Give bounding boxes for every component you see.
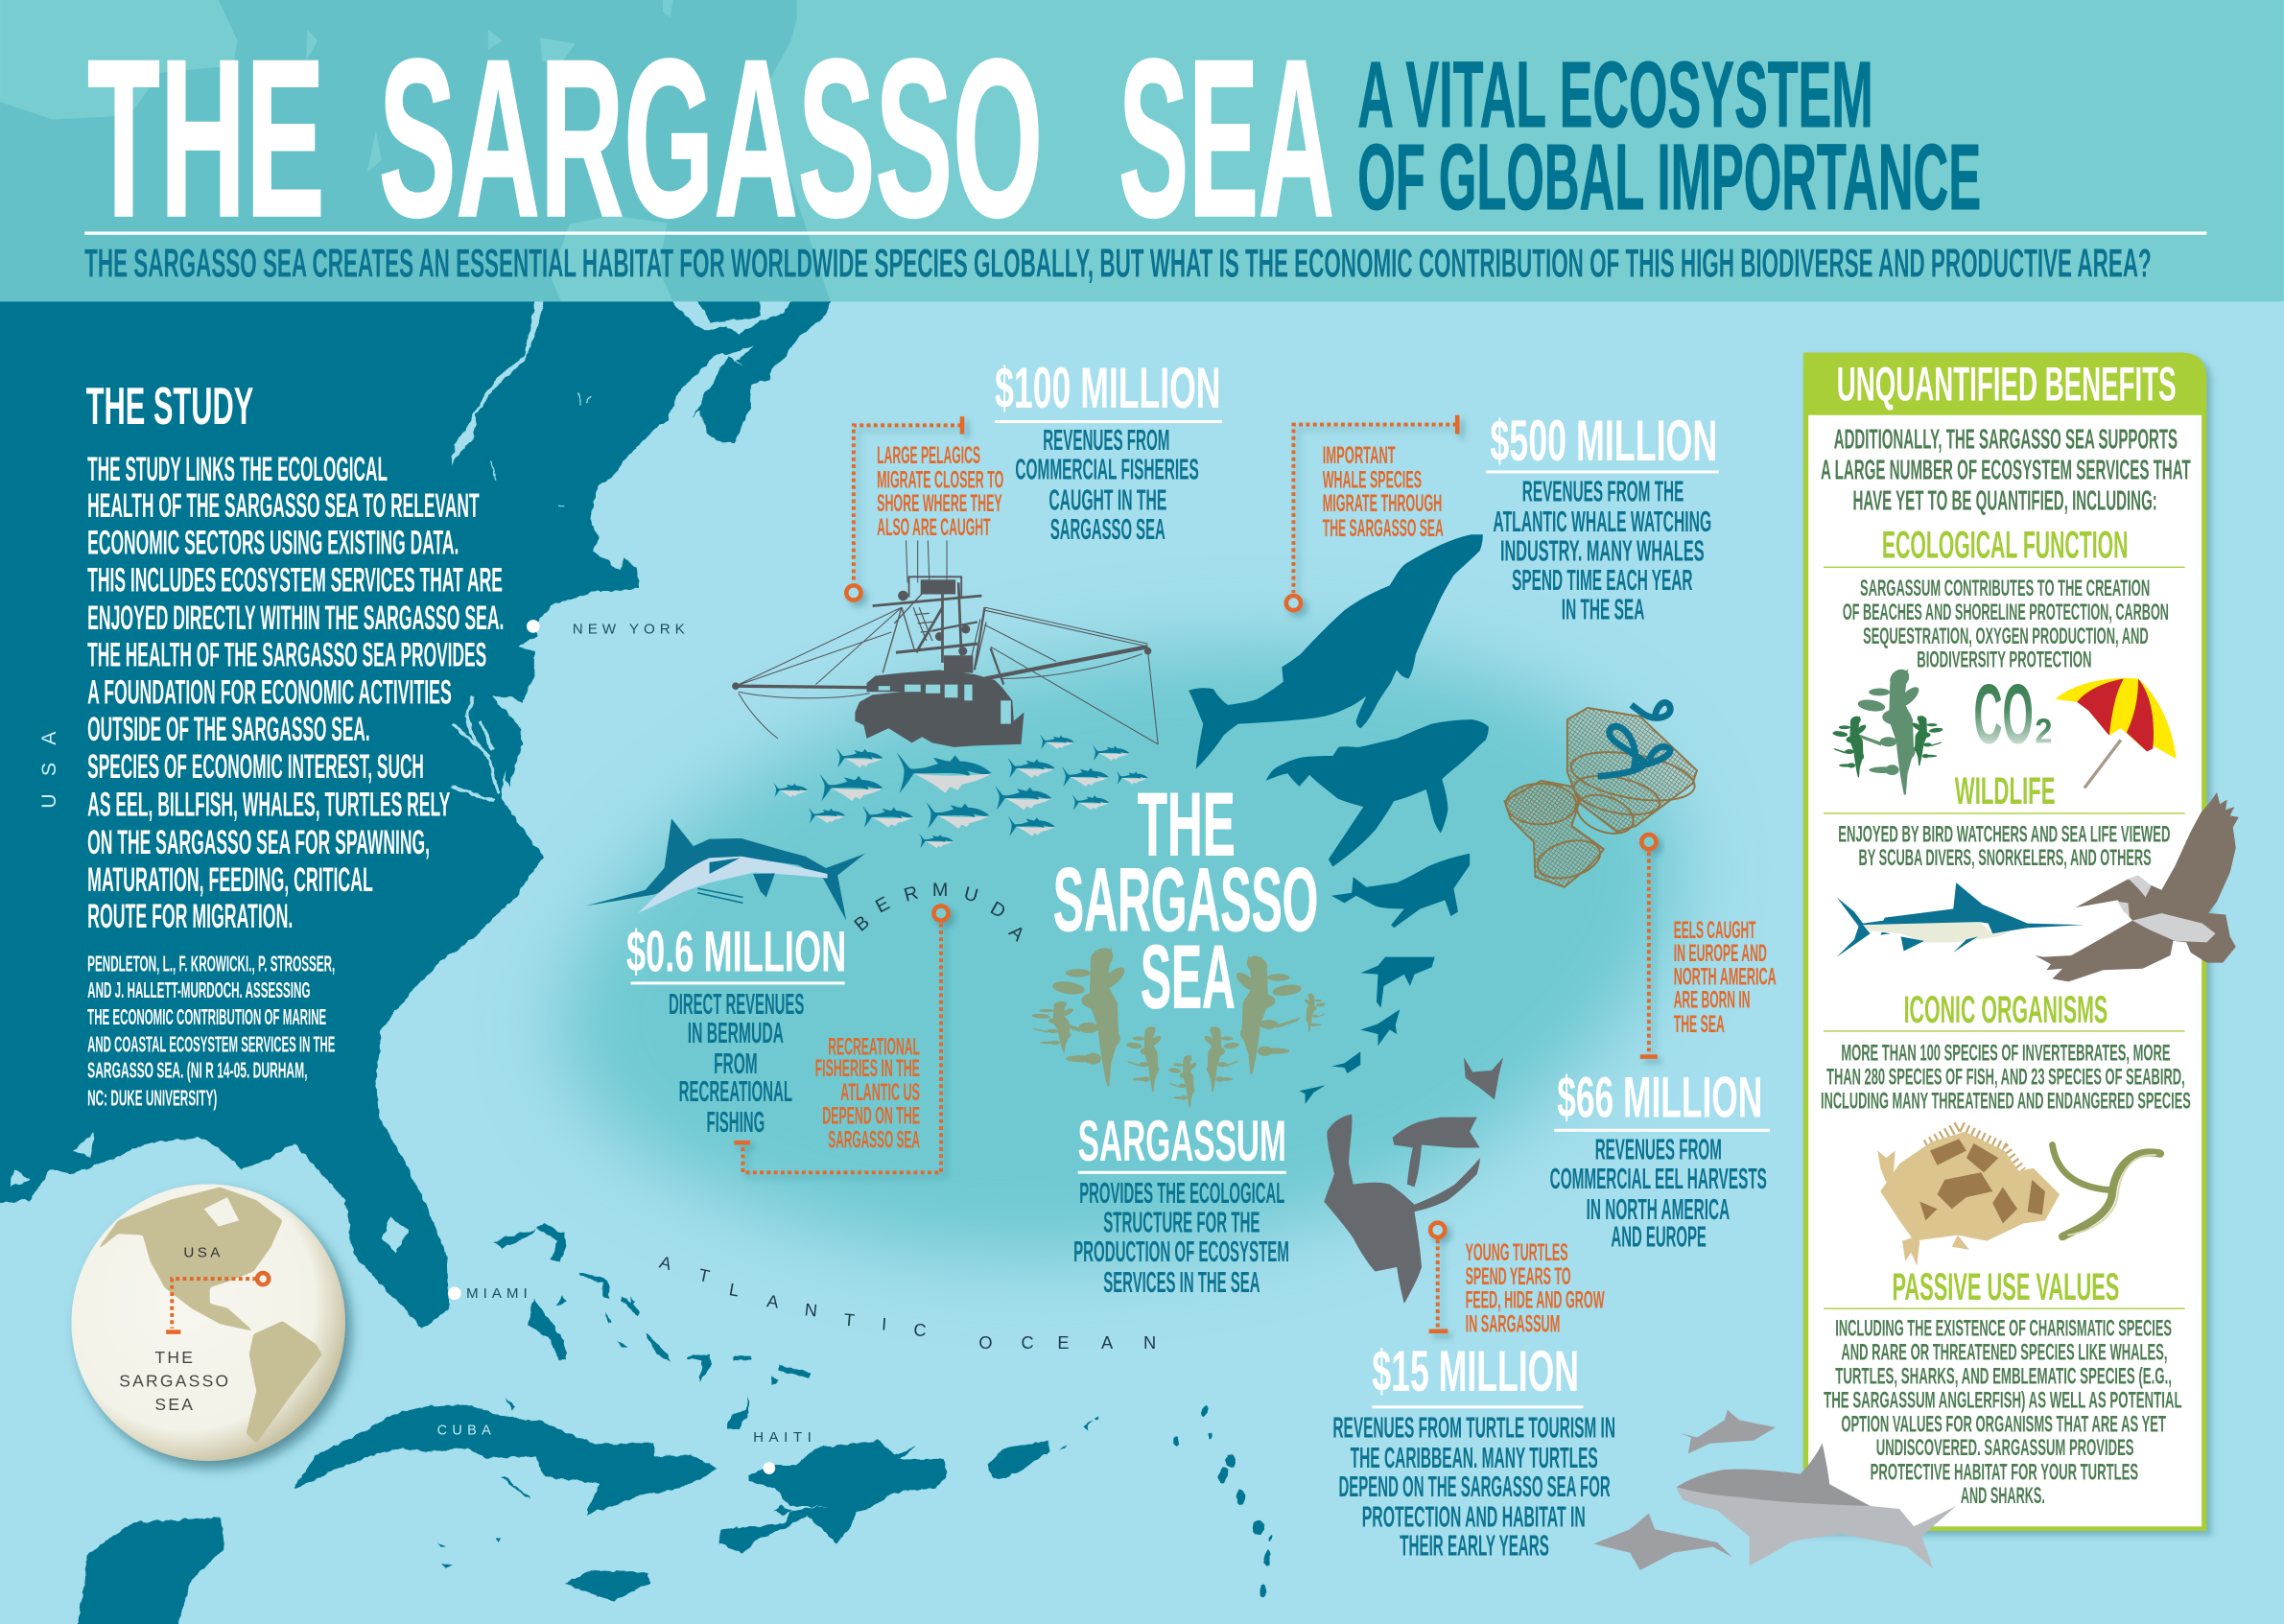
callout: $15 million: REVENUES FROM TURTLE TOURISM IN [1332, 1413, 1615, 1445]
text block: study description: A FOUNDATION FOR ECONOMIC ACTIVITIES [87, 673, 452, 711]
boat windows [879, 685, 1011, 724]
icon: pelican [2035, 792, 2239, 981]
land: Jamaica [565, 1570, 651, 1601]
gulf of saint lawrence [671, 298, 794, 334]
globe connector [172, 1279, 256, 1329]
callout note: eels: NORTH AMERICA [1674, 963, 1777, 990]
callout: $0.6 million: IN BERMUDA [688, 1018, 784, 1049]
callout note: large pelagics: LARGE PELAGICS [877, 442, 980, 469]
callout: $0.6 million: RECREATIONAL [679, 1076, 792, 1108]
marlin [585, 818, 865, 921]
icon: CO2 [1973, 666, 2052, 761]
boat hull [855, 670, 1024, 747]
text block: study description: ENJOYED DIRECTLY WITHIN THE SARGASSO SEA. [87, 600, 504, 637]
text block: citation: AND J. HALLETT-MURDOCH. ASSESSING [87, 977, 311, 1002]
callout: $66 million: IN NORTH AMERICA [1587, 1194, 1730, 1226]
chesapeake bay [452, 696, 498, 801]
title: The Sargasso Sea [87, 12, 1334, 264]
callout note: young turtles: SPEND YEARS TO [1466, 1263, 1571, 1290]
callout note: whale species: MIGRATE THROUGH [1323, 490, 1442, 517]
icon: eels [2052, 1144, 2160, 1236]
callout note: recreational fisheries [734, 906, 949, 1172]
globe inset [71, 1184, 345, 1461]
text block: citation: NC: DUKE UNIVERSITY) [87, 1085, 217, 1110]
sargasso sea glow [560, 645, 1681, 1258]
callout note: large pelagics [846, 416, 1003, 600]
map label: Bermuda: BERMUDA [851, 880, 1029, 946]
whale 6 [1331, 1051, 1360, 1073]
callout: $0.6 million: DIRECT REVENUES [669, 989, 804, 1021]
heading: the study: THE STUDY [86, 377, 253, 435]
panel intro [1821, 425, 2191, 516]
header band [0, 0, 2284, 301]
callout: $0.6 million: $0.6 MILLION [626, 919, 846, 984]
callout: $66 million: COMMERCIAL EEL HARVESTS [1550, 1164, 1767, 1195]
center heading: the sargasso sea [1053, 773, 1318, 1027]
callout note: whale species: THE SARGASSO SEA [1323, 515, 1444, 542]
callout: sargassum: SERVICES IN THE SEA [1103, 1267, 1260, 1299]
callout: $66 million: AND EUROPE [1611, 1222, 1707, 1254]
callout note: recreational fisheries: RECREATIONAL [828, 1033, 920, 1060]
globe: ice cap [204, 1197, 239, 1226]
text block: study description: THIS INCLUDES ECOSYSTEM SERVICES THAT ARE [87, 561, 503, 599]
text block: study description: ROUTE FOR MIGRATION. [87, 898, 293, 935]
callout note: eels: ARE BORN IN [1674, 987, 1750, 1014]
callout: $0.6 million: FISHING [707, 1107, 765, 1139]
icon: sargassum [1832, 666, 1943, 794]
callout note: eels: EELS CAUGHT [1674, 917, 1756, 944]
text: AND COASTAL ECOSYSTEM SERVICES IN THE [87, 1031, 335, 1056]
map label: Miami: MIAMI [466, 1285, 528, 1302]
text block: study description: THE STUDY LINKS THE ECOLOGICAL [87, 451, 388, 488]
map label: Haiti [753, 1429, 812, 1474]
lakes [491, 393, 590, 506]
turtle: large [1324, 1115, 1480, 1304]
text block: study description: AS EEL, BILLFISH, WHALES, TURTLES RELY [87, 786, 450, 823]
callout note: eels: IN EUROPE AND [1674, 940, 1767, 967]
turtle: small [1464, 1057, 1503, 1099]
text block: study description: HEALTH OF THE SARGASSO SEA TO RELEVANT [87, 487, 480, 525]
section: wildlife [1824, 770, 2185, 871]
section: passive use values: AND SHARKS. [1961, 1483, 2045, 1509]
text block: study description: ON THE SARGASSO SEA FOR SPAWNING, [87, 824, 430, 861]
land: keys and lesser antilles [437, 1399, 1099, 1568]
subtitle: a vital ecosystem of global importance [1357, 42, 1981, 229]
callout: sargassum: PROVIDES THE ECOLOGICAL [1079, 1178, 1284, 1210]
map label: Atlantic Ocean: ATLANTIC OCEAN [657, 1253, 1156, 1353]
callout: $500 million [1486, 408, 1719, 625]
callout note: eels [1640, 835, 1777, 1059]
globe: south america [247, 1321, 322, 1444]
header rule [84, 231, 2206, 235]
callout note: recreational fisheries: SARGASSO SEA [828, 1126, 920, 1153]
callout: $15 million: THEIR EARLY YEARS [1400, 1531, 1549, 1563]
text block: study description: ECONOMIC SECTORS USING EXISTING DATA. [87, 525, 459, 562]
text: PRODUCTION OF ECOSYSTEM [1073, 1236, 1289, 1268]
school of tuna [773, 735, 1148, 848]
globe: north america [96, 1187, 283, 1331]
callout: $100 million: $100 MILLION [995, 355, 1220, 420]
callout note: recreational fisheries: FISHERIES IN THE [815, 1055, 920, 1082]
land: Hispaniola [718, 1441, 947, 1553]
callout: $500 million: INDUSTRY. MANY WHALES [1500, 536, 1705, 568]
callout note: young turtles: FEED, HIDE AND GROW [1466, 1287, 1605, 1314]
callout: $500 million: IN THE SEA [1562, 594, 1644, 625]
land: Bahamas [494, 1223, 812, 1429]
whale 3 [1331, 854, 1470, 928]
callout note: young turtles [1429, 1223, 1605, 1338]
text block: study description: OUTSIDE OF THE SARGASSO SEA. [87, 711, 370, 748]
large shark [1677, 1444, 1956, 1568]
whale 1 [1189, 534, 1483, 769]
icon: anglerfish [1877, 1126, 2060, 1265]
whales [1189, 534, 1489, 1104]
text: MIGRATE CLOSER TO [877, 467, 1003, 494]
eel nets [1505, 708, 1698, 887]
text block: citation: THE ECONOMIC CONTRIBUTION OF MARINE [87, 1004, 326, 1029]
sargassum plants [1031, 944, 1326, 1108]
turtle: medium [1393, 1118, 1480, 1187]
callout: $100 million: REVENUES FROM [1043, 425, 1169, 457]
turtles [1324, 1057, 1503, 1304]
callout note: eels: THE SEA [1674, 1011, 1725, 1038]
saint lawrence river [452, 292, 546, 466]
text block: study description: SPECIES OF ECONOMIC INTEREST, SUCH [87, 748, 424, 786]
callout: $15 million: PROTECTION AND HABITAT IN [1362, 1501, 1586, 1533]
callout: $15 million [1332, 1338, 1615, 1563]
title: The Sargasso Sea: SARGASSO [379, 12, 1043, 264]
callout: $100 million: CAUGHT IN THE [1048, 484, 1166, 516]
callout note: large pelagics: ALSO ARE CAUGHT [877, 514, 991, 541]
icon: beach umbrella [2056, 678, 2177, 788]
callout: $500 million: ATLANTIC WHALE WATCHING [1493, 506, 1711, 538]
text block: study description: MATURATION, FEEDING, CRITICAL [87, 861, 373, 899]
callout: $100 million: SARGASSO SEA [1050, 514, 1166, 546]
text block: citation [87, 952, 335, 1110]
land: Yucatan [78, 1518, 224, 1624]
center heading: the sargasso sea: SARGASSO [1053, 849, 1318, 950]
section: ecological function: BIODIVERSITY PROTECTION [1917, 647, 2091, 672]
map label: Haiti: HAITI [753, 1429, 812, 1446]
map label: New York [527, 620, 685, 637]
callout note: whale species: IMPORTANT [1323, 442, 1396, 469]
callout: sargassum: STRUCTURE FOR THE [1103, 1208, 1260, 1239]
callout: $66 million: $66 MILLION [1557, 1065, 1762, 1130]
callout: sargassum [1073, 1108, 1289, 1299]
boat rigging [736, 540, 1158, 744]
land: Cuba [294, 1405, 718, 1515]
callout note: young turtles: YOUNG TURTLES [1466, 1239, 1568, 1266]
whale 5 [1360, 1009, 1400, 1046]
callout note: large pelagics: SHORE WHERE THEY [877, 490, 1002, 517]
section: iconic organisms: ICONIC ORGANISMS [1904, 989, 2107, 1031]
shark: lower left [1593, 1514, 1731, 1570]
land: Puerto Rico [988, 1441, 1048, 1480]
callout: $15 million: $15 MILLION [1372, 1338, 1579, 1403]
icon: CO2: CO [1973, 666, 2034, 761]
globe label: the sargasso sea [119, 1348, 230, 1414]
section: ecological function [1824, 525, 2185, 672]
map label: Cuba: CUBA [437, 1424, 491, 1439]
boat booms and masts [736, 577, 1148, 688]
fishing boat [732, 540, 1158, 747]
text block: study description [87, 451, 504, 935]
callout: $0.6 million [626, 919, 846, 1139]
callout: $500 million: $500 MILLION [1490, 408, 1717, 473]
inlet [725, 345, 755, 367]
text block: citation: SARGASSO SEA. (NI R 14-05. DURHAM, [87, 1058, 307, 1083]
whale 2 [1266, 719, 1489, 866]
whale 4 [1360, 957, 1435, 1008]
icon: CO2: 2 [2035, 711, 2052, 750]
callout note: young turtles: IN SARGASSUM [1466, 1311, 1560, 1338]
land: eastern North America [0, 284, 837, 1329]
icon: swordfish [1837, 883, 2084, 957]
center heading: the sargasso sea: THE [1138, 773, 1236, 874]
callout: $15 million: DEPEND ON THE SARGASSO SEA FOR [1338, 1471, 1611, 1503]
panel: unquantified benefits [1803, 352, 2239, 1531]
eel in the net [1598, 702, 1670, 776]
center heading: the sargasso sea: SEA [1141, 927, 1236, 1027]
callout: $100 million: COMMERCIAL FISHERIES [1015, 455, 1199, 486]
map label: New York: NEW YORK [573, 621, 685, 637]
callout: $66 million [1550, 1065, 1770, 1254]
whale 7 [1299, 1085, 1326, 1104]
section: passive use values [1824, 1266, 2185, 1509]
callout: $500 million: REVENUES FROM THE [1522, 476, 1684, 507]
callout: $15 million: THE CARIBBEAN. MANY TURTLES [1351, 1443, 1598, 1474]
globe label: the sargasso sea: SEA [154, 1395, 195, 1414]
title: The Sargasso Sea: THE [87, 12, 325, 264]
map: land masses [0, 284, 1272, 1624]
section: wildlife: WILDLIFE [1955, 770, 2056, 812]
text block: study description: THE HEALTH OF THE SARGASSO SEA PROVIDES [87, 637, 486, 674]
globe label: USA: USA [183, 1244, 221, 1260]
island [696, 298, 761, 322]
globe label: the sargasso sea: THE [154, 1348, 195, 1367]
text: SEA [1118, 12, 1334, 264]
callout note: whale species: WHALE SPECIES [1323, 467, 1422, 494]
shark: top [1681, 1410, 1776, 1453]
globe label: the sargasso sea: SARGASSO [119, 1372, 230, 1391]
text: PENDLETON, L., F. KROWICKI., P. STROSSER, [87, 952, 335, 977]
callout: $500 million: SPEND TIME EACH YEAR [1512, 565, 1692, 597]
callout: $66 million: REVENUES FROM [1595, 1135, 1722, 1166]
sharks: background [1593, 1410, 1776, 1570]
callout note: recreational fisheries: ATLANTIC US [840, 1079, 920, 1106]
long island sound [540, 598, 582, 619]
callout: $0.6 million: FROM [714, 1048, 758, 1080]
section: iconic organisms [1821, 989, 2191, 1114]
callout note: whale species [1286, 415, 1460, 610]
callout: $100 million [995, 355, 1222, 546]
map label: USA: USA [37, 714, 60, 809]
callout: sargassum: SARGASSUM [1078, 1108, 1286, 1173]
callout note: recreational fisheries: DEPEND ON THE [822, 1102, 920, 1129]
